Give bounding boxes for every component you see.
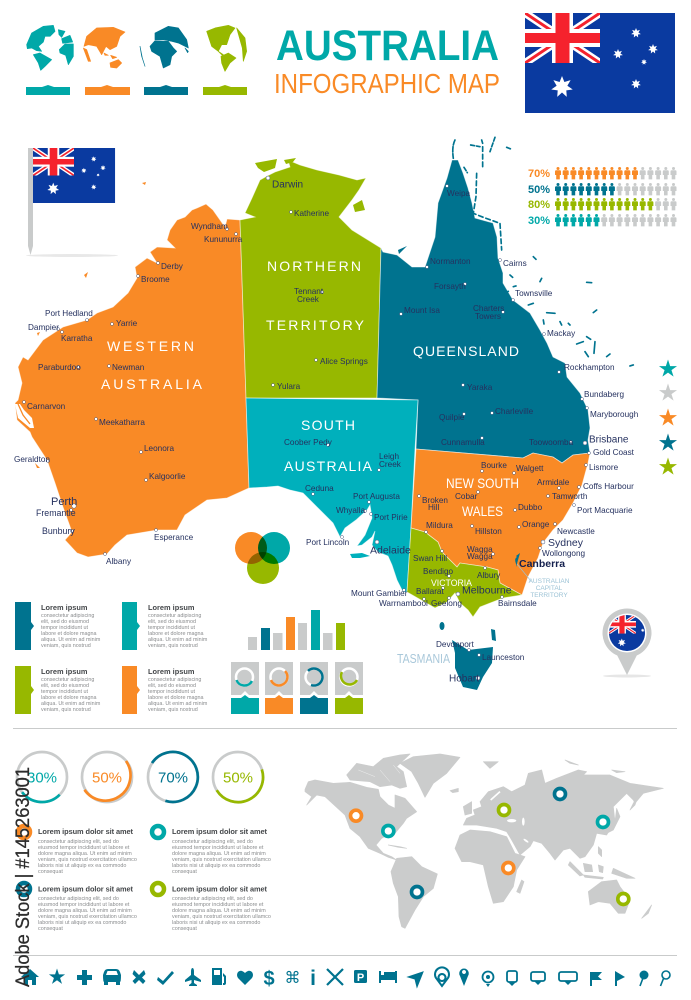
pictogram percentage chart <box>528 167 676 227</box>
text block: dark teal: aliqua. Ut enim ad minim <box>41 637 101 643</box>
text block: orange: veniam, quis nostrud <box>148 707 198 713</box>
city labels: Melbourne <box>462 584 512 596</box>
note: green: consequat <box>172 926 197 932</box>
city labels: Charleville <box>495 407 534 416</box>
city labels: Forsayth <box>434 282 466 291</box>
city labels: Hillston <box>475 527 502 536</box>
region name: Victoria: VICTORIA <box>431 578 473 589</box>
note: dark teal: Lorem ipsum dolor sit amet <box>38 884 134 894</box>
note: green: consectetur adipiscing elit, sed do <box>172 896 253 902</box>
region name: Western Australia: AUSTRALIA <box>101 376 203 392</box>
region name: Queensland: QUEENSLAND <box>413 343 519 359</box>
venn diagram <box>235 532 290 584</box>
text block: cyan: consectetur adipiscing <box>148 613 201 619</box>
bar chart <box>248 610 345 650</box>
ring: 50 percent: 50% <box>92 770 122 786</box>
city labels: Yulara <box>277 382 301 391</box>
city labels: Wagga <box>467 552 493 561</box>
note: cyan: dolore magna aliqua. Ut enim ad minim <box>172 851 266 857</box>
globe base: cyan <box>26 85 70 95</box>
territory: ACT <box>515 553 520 567</box>
city labels: Maryborough <box>590 410 639 419</box>
ACT leader line <box>517 564 531 581</box>
title: AUSTRALIA <box>276 22 499 70</box>
region name: Western Australia: WESTERN <box>107 338 194 354</box>
large flag of Australia <box>525 13 675 113</box>
text block: green: veniam, quis nostrud <box>41 707 91 713</box>
text block: cyan: Lorem ipsum <box>148 603 195 612</box>
text block: cyan <box>122 602 208 650</box>
icon: command: ⌘ <box>284 968 300 987</box>
text block: green: elit, sed do eiusmod <box>41 683 89 689</box>
note: cyan: eiusmod tempor incididunt ut labore et <box>172 845 264 851</box>
globe base: orange <box>85 85 130 95</box>
panel: dark teal ring <box>300 662 328 714</box>
state: Northern Territory <box>240 158 381 398</box>
city labels: Karratha <box>61 334 93 343</box>
city labels: Toowoomba <box>529 438 574 447</box>
legend stars <box>659 360 677 475</box>
text block: orange <box>122 666 208 714</box>
icon: pin <box>435 967 449 986</box>
icon: target pin <box>482 972 494 987</box>
region names <box>101 258 570 666</box>
ring: 50 percent green: 50% <box>223 770 253 786</box>
state: Tasmania <box>440 622 496 690</box>
city labels: Albany <box>106 557 132 566</box>
region name: Western Australia <box>101 338 203 392</box>
percentage rings <box>17 752 263 802</box>
text block: dark teal: tempor incididunt ut <box>41 625 89 631</box>
icon: banner flag <box>590 972 602 986</box>
icon: plane <box>185 968 201 986</box>
note: dark teal <box>18 883 137 932</box>
text block: dark teal: veniam, quis nostrud <box>41 643 91 649</box>
city labels: Leonora <box>144 444 174 453</box>
ring: 30 percent <box>17 752 67 802</box>
globe: green <box>207 25 247 71</box>
icon: home <box>21 969 39 985</box>
note: green: veniam, quis nostrud exercitation ullamco <box>172 914 271 920</box>
city labels: Port Macquarie <box>577 506 633 515</box>
note: green: dolore magna aliqua. Ut enim ad minim <box>172 908 266 914</box>
text block: green: labore et dolore magna <box>41 695 96 701</box>
divider <box>13 955 677 956</box>
city labels: Broken <box>422 496 448 505</box>
icon: heart <box>237 971 253 985</box>
text block: cyan: tempor incididunt ut <box>148 625 196 631</box>
text block: dark teal <box>15 602 101 650</box>
city labels: Cunnamulla <box>441 438 485 447</box>
note: orange: eiusmod tempor incididunt ut labore et <box>38 845 130 851</box>
city labels: Lismore <box>589 463 619 472</box>
city labels: Normanton <box>430 257 471 266</box>
reef islands <box>453 137 633 366</box>
city labels: Port Augusta <box>353 492 400 501</box>
note: orange: consectetur adipiscing elit, sed do <box>38 839 119 845</box>
row: 80 percent <box>528 198 676 211</box>
note: cyan <box>152 826 271 875</box>
city labels: Mildura <box>426 521 453 530</box>
region name: South Australia <box>284 417 373 474</box>
panel: cyan ring <box>231 662 259 714</box>
panel: orange ring <box>265 662 293 714</box>
text block: green: Lorem ipsum <box>41 667 88 676</box>
city labels: Bundaberg <box>584 390 625 399</box>
city labels: Wollongong <box>542 549 586 558</box>
note: orange: Lorem ipsum dolor sit amet <box>38 827 134 836</box>
ring: 70 percent <box>148 752 198 802</box>
city labels: Ballarat <box>416 587 444 596</box>
text block: orange: labore et dolore magna <box>148 695 203 701</box>
region name: Australian Capital Territory: AUSTRALIAN <box>529 578 570 585</box>
row: 30 percent <box>528 214 676 227</box>
city labels: Fremantle <box>36 508 76 518</box>
city labels: Yarrie <box>116 319 138 328</box>
city labels: Bourke <box>481 461 507 470</box>
stock image id watermark: Adobe Stock | #145263001 <box>13 767 34 987</box>
icon: navigation arrow <box>408 972 423 987</box>
ring: 70 percent: 70% <box>158 770 188 786</box>
icon: check <box>157 971 174 985</box>
icon: plus <box>77 970 92 985</box>
text block: dark teal: elit, sed do eiusmod <box>41 619 89 625</box>
note: dark teal: dolore magna aliqua. Ut enim ad minim <box>38 908 132 914</box>
state: Victoria <box>407 528 522 617</box>
divider <box>13 728 677 729</box>
icon: small pin <box>459 969 469 986</box>
city labels: Charters <box>473 304 504 313</box>
city labels: Mount Gambier <box>351 589 408 598</box>
note: dark teal: consectetur adipiscing elit, sed do <box>38 896 119 902</box>
city labels: Cobar <box>455 492 478 501</box>
text block: cyan: labore et dolore magna <box>148 631 203 637</box>
ring: 50 percent <box>82 752 132 802</box>
icon: fuel pump <box>212 968 226 985</box>
city labels: Meekatharra <box>99 418 145 427</box>
ring: 30 percent: 30% <box>27 770 57 786</box>
city labels: Leigh <box>379 452 399 461</box>
city labels: Launceston <box>482 653 525 662</box>
city labels: Carnarvon <box>27 402 66 411</box>
text block: cyan: elit, sed do eiusmod <box>148 619 196 625</box>
region name: South Australia: AUSTRALIA <box>284 458 373 474</box>
city labels: Gold Coast <box>593 448 635 457</box>
globe: cyan <box>27 25 73 70</box>
icon: info: i <box>310 967 316 990</box>
icon: speech bubble <box>531 972 545 985</box>
city labels: Newman <box>112 363 145 372</box>
note: dark teal: laboris nisi ut aliquip ex ea commodo <box>38 920 126 926</box>
row: 70 percent: 70% <box>528 168 550 180</box>
text block: green: consectetur adipiscing <box>41 677 94 683</box>
Eurasia, Africa and Oceania <box>455 760 663 918</box>
city labels: Sydney <box>548 537 584 549</box>
note: orange: dolore magna aliqua. Ut enim ad minim <box>38 851 132 857</box>
note: cyan: veniam, quis nostrud exercitation ullamco <box>172 857 271 863</box>
city labels: Canberra <box>519 558 565 570</box>
ring panels <box>231 662 363 714</box>
city labels: Tamworth <box>552 492 588 501</box>
city labels: Walgett <box>516 464 544 473</box>
region name: Northern Territory: TERRITORY <box>266 317 365 333</box>
icon row <box>21 967 670 990</box>
icon: car <box>103 969 121 985</box>
region name: Australian Capital Territory: CAPITAL <box>536 585 563 592</box>
note: cyan: laboris nisi ut aliquip ex ea commodo <box>172 863 260 869</box>
globe: dark teal <box>140 26 188 68</box>
text block: dark teal: consectetur adipiscing <box>41 613 94 619</box>
note: green <box>152 883 271 932</box>
city labels: Katherine <box>294 209 329 218</box>
city labels: Weipa <box>447 189 471 198</box>
text block: orange: elit, sed do eiusmod <box>148 683 196 689</box>
row: 80 percent: 80% <box>528 199 550 211</box>
icon: marker square <box>507 971 517 986</box>
city labels: Cairns <box>503 259 527 268</box>
text block: green: tempor incididunt ut <box>41 689 89 695</box>
city labels: Orange <box>522 520 550 529</box>
note: dark teal: veniam, quis nostrud exercitation ullamco <box>38 914 137 920</box>
city labels: Hobart <box>449 674 479 684</box>
globes row <box>26 25 247 95</box>
city labels: Devonport <box>436 640 475 649</box>
text block: cyan: aliqua. Ut enim ad minim <box>148 637 208 643</box>
city labels: Alice Springs <box>320 357 368 366</box>
text block: green <box>15 666 101 714</box>
note: orange: veniam, quis nostrud exercitation ullamco <box>38 857 137 863</box>
city labels: Whyalla <box>336 506 366 515</box>
icon: round pin <box>640 970 648 986</box>
row: 50 percent <box>528 183 676 196</box>
text block: orange: aliqua. Ut enim ad minim <box>148 701 208 707</box>
map pin with flag <box>602 608 652 678</box>
city labels: Geelong <box>431 599 462 608</box>
city labels: Broome <box>141 275 170 284</box>
icon: dollar: $ <box>263 968 275 990</box>
panel: green ring <box>335 662 363 714</box>
text block: dark teal: labore et dolore magna <box>41 631 96 637</box>
city markers <box>22 176 590 680</box>
text block: cyan: veniam, quis nostrud <box>148 643 198 649</box>
city labels: Mackay <box>547 329 576 338</box>
region name: New South Wales <box>446 476 519 519</box>
city labels: Townsville <box>515 289 553 298</box>
city labels: Rockhampton <box>564 363 615 372</box>
city labels: Tennant <box>294 287 324 296</box>
text block: green: aliqua. Ut enim ad minim <box>41 701 101 707</box>
city labels: Towers <box>475 312 501 321</box>
city labels: Esperance <box>154 533 194 542</box>
text block: dark teal: Lorem ipsum <box>41 603 88 612</box>
row: 70 percent <box>528 167 676 180</box>
city labels: Geraldton <box>14 455 50 464</box>
icon: magnifier <box>660 971 670 986</box>
note: orange: consequat <box>38 869 63 875</box>
region name: New South Wales: WALES <box>462 504 503 519</box>
icon: cross <box>132 970 146 984</box>
note: orange: laboris nisi ut aliquip ex ea commodo <box>38 863 126 869</box>
map of Australia <box>15 137 633 690</box>
city labels: Port Hedland <box>45 309 93 318</box>
state: New South Wales <box>411 449 590 595</box>
city labels: Adelaide <box>370 544 411 556</box>
Americas and Greenland <box>305 754 472 928</box>
note: cyan: Lorem ipsum dolor sit amet <box>172 827 268 836</box>
city labels: Kalgoorlie <box>149 472 186 481</box>
city labels: Ceduna <box>305 484 334 493</box>
ring: 50 percent green <box>213 752 263 802</box>
icon: pennant <box>615 971 625 986</box>
note: cyan: consequat <box>172 869 197 875</box>
city labels <box>14 180 639 684</box>
city labels: Port Pirie <box>374 513 408 522</box>
city labels: Dubbo <box>518 503 543 512</box>
city labels: Albury <box>477 571 501 580</box>
city labels: Swan Hill <box>413 554 447 563</box>
note: green: Lorem ipsum dolor sit amet <box>172 884 268 894</box>
region name: Northern Territory <box>266 258 365 333</box>
city labels: Bendigo <box>423 567 453 576</box>
icon: wide speech bubble <box>559 972 577 985</box>
note: green: eiusmod tempor incididunt ut labore et <box>172 902 264 908</box>
city labels: Darwin <box>272 180 303 190</box>
city labels: Port Lincoln <box>306 538 350 547</box>
text block: orange: consectetur adipiscing <box>148 677 201 683</box>
note: green: laboris nisi ut aliquip ex ea commodo <box>172 920 260 926</box>
city labels: Creek <box>297 295 320 304</box>
city labels: Hill <box>428 503 440 512</box>
note: orange <box>18 826 137 875</box>
city labels: Creek <box>379 460 402 469</box>
icon: star <box>49 968 65 984</box>
location rings <box>350 788 629 904</box>
city labels: Armidale <box>537 478 570 487</box>
globe base: green <box>203 85 247 95</box>
icon: parking: P <box>357 972 364 984</box>
city labels: Paraburdoo <box>38 363 81 372</box>
city labels: Perth <box>51 496 77 508</box>
city labels: Coffs Harbour <box>583 482 634 491</box>
region name: Australian Capital Territory <box>529 578 570 599</box>
state: Queensland <box>377 160 590 463</box>
region name: Northern Territory: NORTHERN <box>267 258 361 274</box>
region name: Tasmania: TASMANIA <box>397 652 451 666</box>
subtitle: INFOGRAPHIC MAP <box>274 68 500 99</box>
city labels: Brisbane <box>589 434 629 446</box>
note: dark teal: consequat <box>38 926 63 932</box>
city labels: Coober Pedy <box>284 438 333 447</box>
city labels: Mount Isa <box>404 306 440 315</box>
small flag on a pole <box>26 148 118 257</box>
city labels: Quilpie <box>439 413 465 422</box>
city labels: Bunbury <box>42 526 75 536</box>
city labels: Newcastle <box>557 527 595 536</box>
city labels: Derby <box>161 262 184 271</box>
globe: orange <box>83 27 125 68</box>
city labels: Wyndham <box>191 222 228 231</box>
note: cyan: consectetur adipiscing elit, sed do <box>172 839 253 845</box>
region name: Australian Capital Territory: TERRITORY <box>530 592 568 599</box>
text block: orange: Lorem ipsum <box>148 667 195 676</box>
city labels: Warrnambool <box>379 599 428 608</box>
state: Western Australia <box>15 182 249 557</box>
city labels: Kununurra <box>204 235 243 244</box>
icon: parking <box>354 970 367 984</box>
row: 30 percent: 30% <box>528 215 550 227</box>
row: 50 percent: 50% <box>528 184 550 196</box>
icon: cutlery <box>327 969 343 985</box>
state: South Australia <box>246 398 418 592</box>
region name: South Australia: SOUTH <box>301 417 355 433</box>
region name: New South Wales: NEW SOUTH <box>446 476 519 491</box>
note: dark teal: eiusmod tempor incididunt ut labore et <box>38 902 130 908</box>
city labels: Wagga <box>467 545 493 554</box>
globe base: dark teal <box>144 85 188 95</box>
city labels: Yaraka <box>467 383 493 392</box>
city labels: Dampier <box>28 323 59 332</box>
text block: orange: tempor incididunt ut <box>148 689 196 695</box>
icon: bed <box>379 971 397 983</box>
city labels: Bairnsdale <box>498 599 537 608</box>
world map <box>305 754 663 928</box>
